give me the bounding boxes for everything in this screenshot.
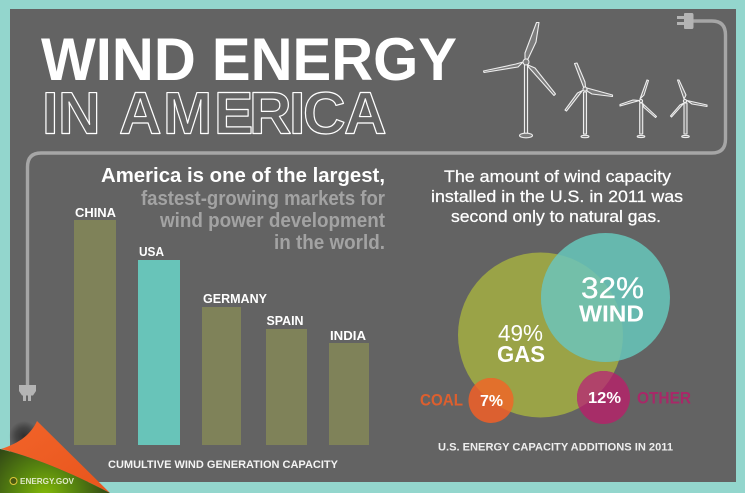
bubble: other	[577, 371, 691, 424]
bar: india: INDIA	[330, 329, 366, 343]
title line: in america: INAMERICA	[42, 80, 387, 146]
bar: spain: SPAIN	[266, 314, 304, 328]
bar: germany	[202, 292, 268, 445]
bubble: coal: 7%	[480, 393, 503, 410]
intro gray lines	[141, 188, 385, 254]
icon: second turbine	[565, 63, 612, 138]
bubble: other: 12%	[588, 390, 621, 407]
icon: third turbine	[620, 80, 656, 138]
bar: spain	[266, 314, 307, 445]
bubble: gas	[458, 252, 623, 418]
intro text: america	[101, 165, 385, 254]
bar: china: CHINA	[75, 206, 116, 220]
intro gray lines: fastest-growing markets for	[141, 188, 385, 210]
bubble: wind: WIND	[579, 300, 644, 326]
bubble: other: OTHER	[637, 388, 691, 408]
icon: fourth turbine	[670, 80, 707, 138]
wind turbines	[484, 22, 707, 138]
icon: large turbine	[484, 22, 556, 138]
bubble: coal	[420, 378, 514, 423]
bar: usa	[138, 245, 180, 445]
bubble: gas: 49%	[498, 320, 543, 346]
curl shadow	[9, 421, 39, 451]
intro text: wind capacity	[431, 168, 683, 226]
icon: bottom plug	[19, 385, 36, 401]
energy.gov logo: ENERGY.GOV	[20, 476, 74, 486]
intro gray lines: in the world.	[274, 232, 385, 254]
bubble: coal: COAL	[420, 390, 463, 410]
bubble chart caption: U.S. ENERGY CAPACITY ADDITIONS IN 2011	[438, 442, 673, 454]
title	[41, 26, 457, 146]
bubble: wind: 32%	[581, 272, 644, 305]
intro gray lines: wind power development	[159, 210, 385, 232]
power cord	[19, 13, 726, 401]
intro text: wind capacity: second only to natural gas.	[451, 208, 661, 226]
intro headline line: America is one of the largest,	[101, 165, 385, 187]
bubble: wind	[541, 233, 670, 362]
bubble chart: energy capacity additions	[420, 233, 691, 454]
curl green corner	[0, 449, 110, 493]
intro text: wind capacity: The amount of wind capacity	[444, 168, 672, 186]
bubble: gas: GAS	[497, 341, 545, 367]
page curl corner	[0, 421, 110, 493]
bar: germany: GERMANY	[203, 292, 268, 306]
intro text: wind capacity: installed in the U.S. in 2011 was	[431, 188, 683, 206]
curl orange flap	[1, 421, 110, 493]
bar: india	[329, 329, 369, 445]
bar: usa: USA	[139, 245, 164, 259]
icon: top plug	[677, 13, 694, 29]
bar chart: cumulative wind generation capacity	[74, 206, 369, 471]
title line: wind energy: WIND ENERGY	[41, 26, 457, 93]
chart caption: CUMULTIVE WIND GENERATION CAPACITY	[108, 459, 339, 471]
bar: china	[74, 206, 116, 445]
